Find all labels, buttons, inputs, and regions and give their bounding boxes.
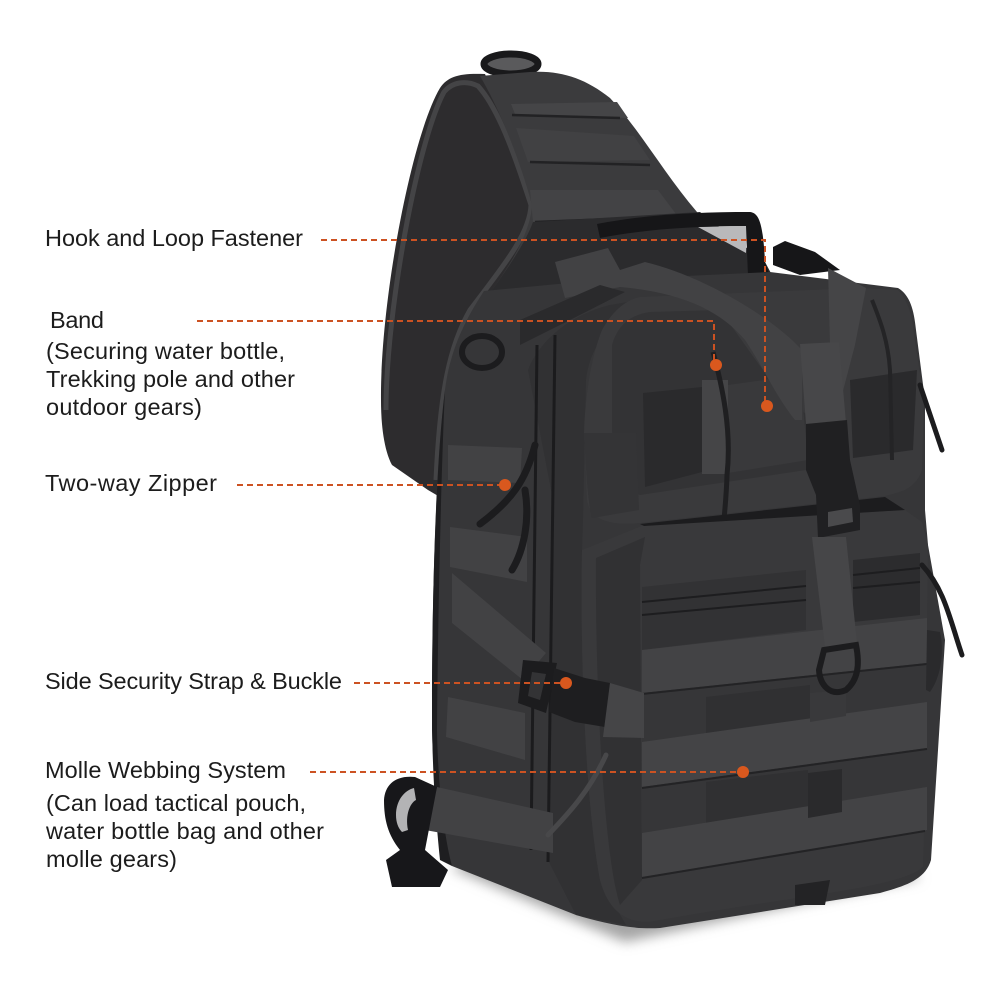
label: Band: Trekking pole and other (46, 366, 295, 392)
top clip (773, 241, 840, 275)
strap edge binding (386, 83, 531, 480)
label: Molle Webbing System: Molle Webbing System (45, 757, 286, 783)
gap under handle (698, 226, 747, 253)
label: Band (46, 307, 722, 420)
top handle (597, 212, 770, 276)
small left pocket (584, 433, 639, 518)
leader line and dot (197, 321, 722, 371)
shoulder strap lining (381, 74, 540, 500)
side security strap (452, 573, 546, 680)
centre strap (812, 537, 857, 647)
label: Molle Webbing System: molle gears) (46, 846, 177, 872)
label: Two-way Zipper (45, 470, 511, 496)
label: Hook and Loop Fastener: Hook and Loop Fastener (45, 225, 303, 251)
label: Two-way Zipper: Two-way Zipper (45, 470, 217, 496)
band over top pocket (555, 248, 802, 420)
label: Molle Webbing System: water bottle bag and other (45, 818, 324, 844)
label: Hook and Loop Fastener (45, 225, 773, 412)
label: Side Security Strap & Buckle: Side Security Strap & Buckle (45, 668, 342, 694)
back panel behind handle (470, 212, 780, 330)
leader line and dot (354, 677, 572, 689)
row separators (642, 664, 927, 878)
label: Molle Webbing System (45, 757, 749, 872)
pull cord (713, 352, 728, 557)
label: Band: (Securing water bottle, (46, 338, 285, 364)
left D-ring (462, 336, 502, 368)
zipper panel (642, 570, 806, 650)
right strap (828, 268, 866, 410)
bottom base strap (795, 880, 830, 905)
buckle strap (800, 342, 846, 424)
main buckle (806, 420, 860, 538)
D-ring on top of strap (484, 54, 538, 74)
side gusset (528, 300, 640, 925)
pocket vertical strap (702, 380, 728, 474)
label: Band: outdoor gears) (46, 394, 202, 420)
gap between pockets (640, 497, 905, 526)
front D-ring (819, 645, 858, 692)
molle webbing rows (642, 618, 927, 877)
zipper pulls (480, 385, 962, 835)
ground shadow (450, 850, 920, 942)
side buckle (518, 660, 644, 738)
shoulder strap front (470, 72, 720, 320)
top pocket (584, 288, 924, 524)
left body frame (432, 390, 452, 866)
lower pocket (582, 510, 928, 922)
leader line and dot (310, 766, 749, 778)
leader line and dot (237, 479, 511, 491)
hook and loop patches (643, 370, 917, 487)
label: Band: Band (50, 307, 104, 333)
main body (432, 272, 945, 928)
backpack illustration (381, 54, 962, 942)
side pocket right (926, 630, 942, 692)
label: Side Security Strap & Buckle (45, 668, 572, 694)
bottom strap clip (384, 777, 448, 887)
side webbing (425, 445, 553, 853)
label: Molle Webbing System: (Can load tactical pouch, (46, 790, 306, 816)
leader line and dot (321, 240, 773, 412)
